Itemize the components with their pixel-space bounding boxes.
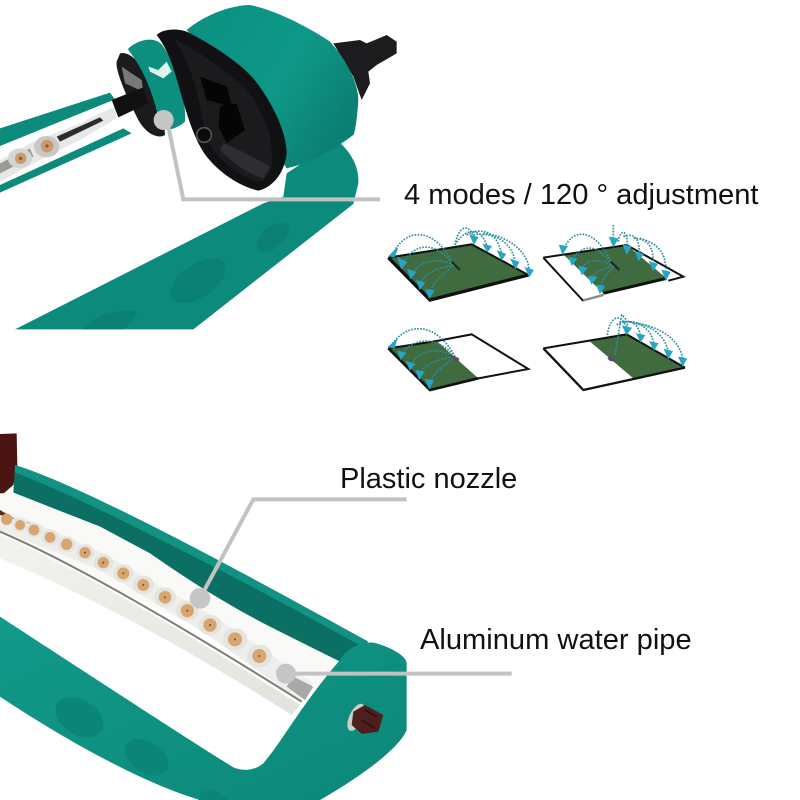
callout line: plastic nozzle: [190, 499, 407, 609]
diagram: full coverage: [388, 228, 533, 300]
lower green frame with holes: [15, 140, 358, 329]
black control disc: [157, 29, 287, 191]
green motor housing: [187, 5, 358, 168]
panel: watering mode diagrams: [388, 225, 686, 390]
label: aluminum water pipe: Aluminum water pipe: [420, 624, 692, 656]
diagram: right half: [543, 315, 686, 390]
panel: sprinkler motor photo: [0, 5, 397, 329]
callout line: modes: [154, 110, 380, 199]
green ring: [128, 40, 185, 130]
diagram: left half: [388, 329, 528, 390]
callout line: aluminum pipe: [276, 664, 512, 684]
heading: 4 modes: 4 modes / 120 ° adjustment: [404, 179, 758, 211]
hose connector: [333, 35, 397, 100]
panel: sprinkler frame photo: [0, 433, 512, 800]
label: plastic nozzle: Plastic nozzle: [340, 463, 517, 495]
black shaft: [112, 87, 148, 117]
aluminum pipe: [0, 510, 313, 715]
diagram: right three quarters: [543, 225, 683, 301]
red knob left: [0, 433, 17, 497]
left arms and aluminum pipe: [0, 93, 132, 193]
black rear hub: [117, 53, 165, 136]
red adjustment knob: [344, 701, 383, 734]
back rail: [0, 465, 368, 687]
brass nozzles: [1, 514, 272, 667]
front rail and end cap: [0, 617, 407, 800]
